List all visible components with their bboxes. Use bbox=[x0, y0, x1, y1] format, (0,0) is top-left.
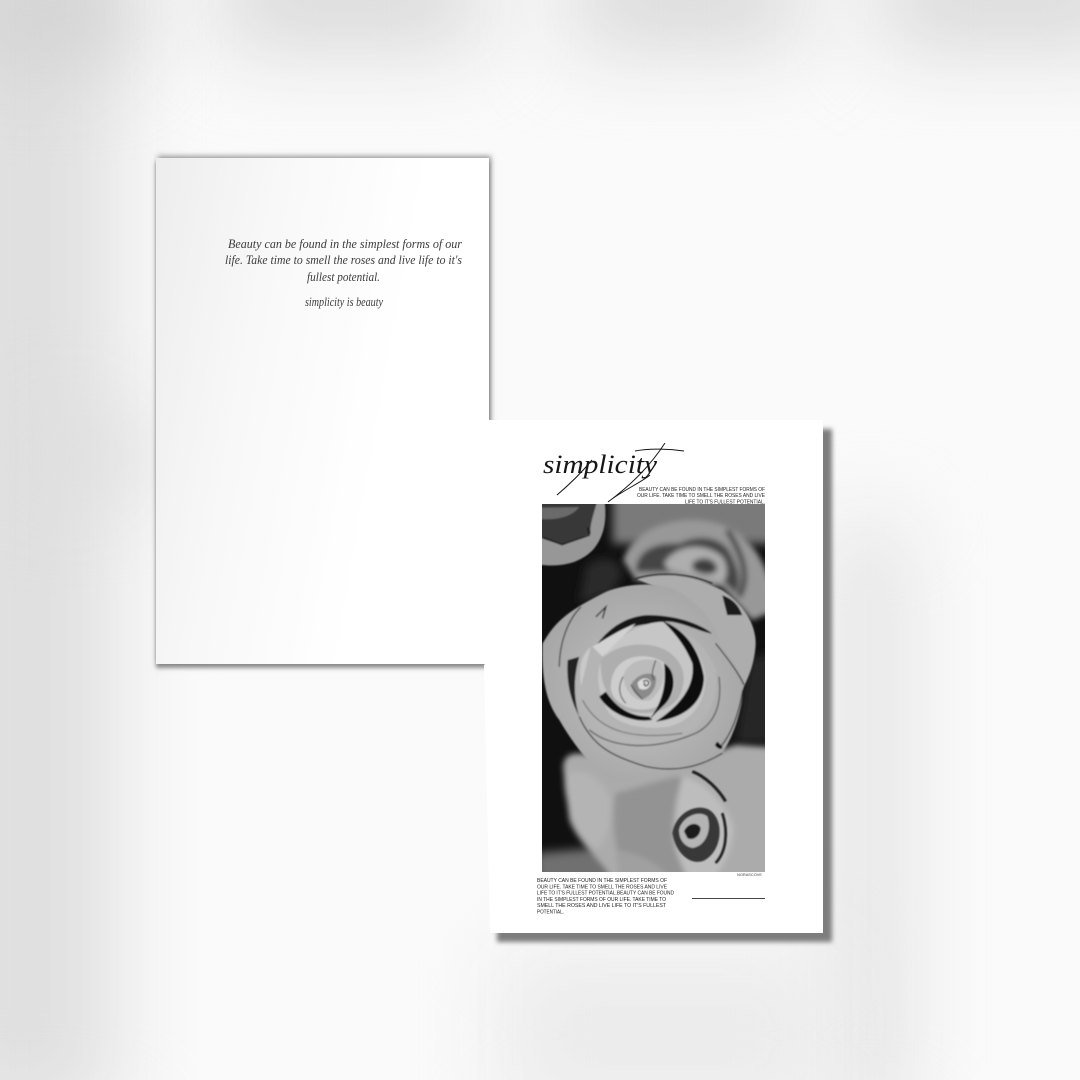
title: simplicity bbox=[543, 442, 684, 502]
bottom rose bbox=[563, 745, 782, 886]
card shadow bbox=[497, 429, 832, 942]
body text: BEAUTY CAN BE FOUND IN THE SIMPLEST FORMS OF bbox=[537, 878, 667, 884]
photo: black and white roses bbox=[542, 504, 765, 872]
back petals of main rose bbox=[632, 574, 755, 690]
quote text: fullest potential. bbox=[307, 270, 380, 284]
body text bbox=[537, 878, 674, 916]
body text: POTENTIAL. bbox=[537, 910, 564, 916]
body text: IN THE SIMPLEST FORMS OF OUR LIFE. TAKE TIME TO bbox=[537, 897, 666, 903]
card sheet bbox=[484, 420, 823, 933]
panel: front card bbox=[484, 420, 836, 946]
intro text bbox=[637, 487, 765, 505]
panel: back card bbox=[156, 158, 489, 664]
body text: SMELL THE ROSES AND LIVE LIFE TO IT'S FULLEST bbox=[537, 903, 666, 909]
body text: OUR LIFE. TAKE TIME TO SMELL THE ROSES AND LIVE bbox=[537, 884, 667, 890]
quote text: simplicity is beauty bbox=[305, 295, 383, 309]
quote text: life. Take time to smell the roses and live life to it's bbox=[225, 253, 462, 267]
top right rose bbox=[623, 520, 775, 620]
main rose bbox=[542, 584, 743, 782]
signature line bbox=[692, 898, 765, 899]
quote text: Beauty can be found in the simplest forms of our bbox=[228, 237, 462, 251]
photo credit: NORASCOVE bbox=[737, 872, 762, 877]
top left rose bbox=[532, 497, 605, 566]
quote text bbox=[225, 237, 462, 309]
title: simplicity: simplicity bbox=[543, 450, 658, 479]
